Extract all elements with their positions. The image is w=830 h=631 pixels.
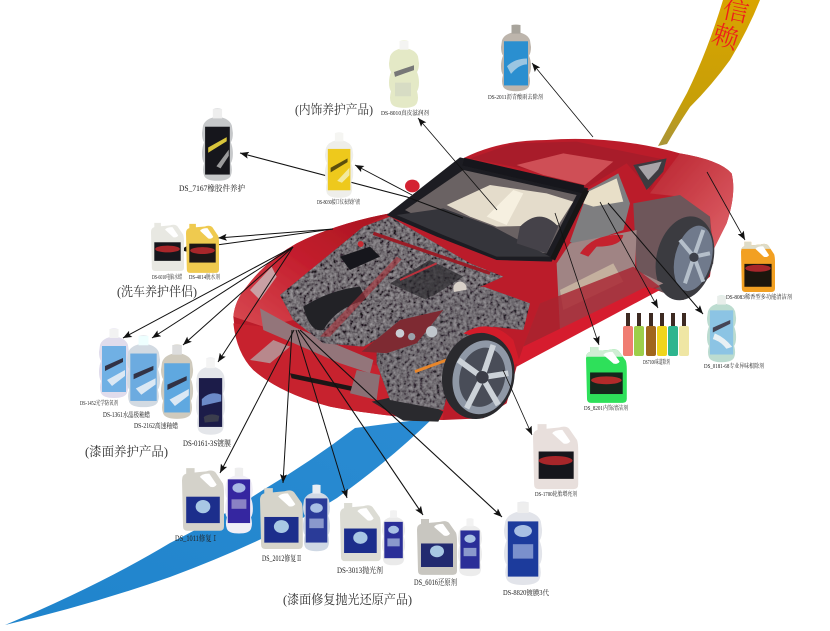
arrow: to yellow jug xyxy=(218,229,333,238)
product: DS-1452 xyxy=(80,328,129,407)
product: DS-0161-3S: DS-0161-3S镀膜 xyxy=(183,438,231,448)
side window xyxy=(570,173,630,247)
headlight area xyxy=(362,310,443,353)
product: white wash jug xyxy=(151,223,184,281)
product: DS_7167: DS_7167橡胶件养护 xyxy=(179,183,245,193)
arrow: to DS_1011 xyxy=(220,330,294,473)
cutaway car illustration xyxy=(233,139,733,426)
product: DS-8030: DS-8030接口仪表保护液 xyxy=(317,198,360,206)
arrow: to DS-8030 xyxy=(355,165,412,195)
product: DS_0181-68 xyxy=(704,295,764,370)
bumper translucent grey band xyxy=(260,308,373,373)
windshield frame xyxy=(387,157,588,262)
slogan text xyxy=(708,0,753,57)
heading: wash companions: (洗车养护伴侣) xyxy=(117,284,197,299)
product: yellow jug: DS-4014脱水剂 xyxy=(189,273,220,281)
product: DS-2011: DS-2011沥青酸雨去除剂 xyxy=(488,93,543,101)
arrow: to white jug xyxy=(180,229,333,250)
product: DS-1452: DS-1452光学防氧剂 xyxy=(80,399,118,407)
arrow: to DS_2012 xyxy=(283,330,292,483)
heading: paint restoration: (漆面修复抛光还原产品) xyxy=(283,592,412,607)
dashboard xyxy=(397,208,550,257)
roof panel xyxy=(470,142,667,190)
product: DS_8201 xyxy=(584,347,628,412)
product: DS-8820: DS-8820镀膜3代 xyxy=(503,588,549,597)
product: DS-0161-3S xyxy=(183,358,231,448)
product: DS-1361 xyxy=(103,336,160,419)
arrow: to DS-0161 xyxy=(218,247,293,362)
front fender cutaway xyxy=(377,287,530,410)
arrow: to DS_0181 xyxy=(608,203,703,314)
leader arrows xyxy=(123,63,745,517)
product: DS-1700 xyxy=(533,424,578,498)
arrow: to DS_8201 xyxy=(555,213,599,345)
door xyxy=(557,230,663,330)
rear quarter panel xyxy=(650,153,733,250)
front wheel xyxy=(434,326,523,426)
left mirror xyxy=(405,180,420,192)
bumper lower vents xyxy=(250,340,290,363)
product: DS_2012 set: DS_2012修复Ⅱ xyxy=(262,553,302,563)
blue swoosh xyxy=(5,418,433,625)
left headlight xyxy=(250,267,277,300)
product: DS_7167 xyxy=(179,109,245,193)
arrow: to DS-8083 xyxy=(707,172,745,240)
product: DS-2011 xyxy=(488,24,543,101)
product: DS_0181-68: DS_0181-68专业异味根除剂 xyxy=(704,362,764,370)
product: DS-8083: DS-8083稀香型多功能清洁剂 xyxy=(726,293,792,301)
product: white wash jug: DS-6010电脑水蜡 xyxy=(152,273,182,281)
heading: interior care: (内饰养护产品) xyxy=(295,102,373,117)
sunroof interior xyxy=(517,153,613,185)
product: DS_6016 set: DS_6016还原剂 xyxy=(414,577,457,587)
arrow: to DS-8820 xyxy=(300,330,502,517)
product: DS-1361: DS-1361水晶极釉蜡 xyxy=(103,410,150,419)
roof header bar xyxy=(463,162,583,189)
product: DS-2162: DS-2162高速釉蜡 xyxy=(134,421,178,430)
rear wheel xyxy=(647,210,723,307)
heading: paint care: (漆面养护产品) xyxy=(85,444,168,459)
front splitter xyxy=(372,393,443,422)
gold ribbon with slogan xyxy=(658,0,760,146)
product: DS_8201: DS_8201内饰清洁剂 xyxy=(584,404,628,412)
arrow: to DS_6016 xyxy=(298,330,423,515)
arrow: to DS-3013 xyxy=(296,330,347,498)
arrow: to DS-1361 xyxy=(152,247,293,338)
product: DS-3013 set: DS-3013抛光剂 xyxy=(337,565,383,575)
engine bay xyxy=(277,213,510,350)
rear window xyxy=(633,158,667,190)
hood highlight xyxy=(233,213,390,327)
product: DS-2162 xyxy=(134,345,193,430)
arrow: to DS_7167 xyxy=(240,153,463,218)
product: DS-8010: DS-8010真皮滋润剂 xyxy=(381,109,429,117)
product: DS-8083 xyxy=(726,242,792,301)
product: DS-8010 xyxy=(381,40,429,117)
arrow: to DS-1700 xyxy=(503,370,532,435)
product: DS-8820 xyxy=(503,502,549,597)
cream seats xyxy=(447,185,573,227)
car body xyxy=(233,139,733,420)
arrow: to DS-2011 xyxy=(532,63,593,137)
product: fragrance sprays xyxy=(623,313,689,366)
product: DS_1011 set xyxy=(175,467,253,543)
A pillar xyxy=(553,190,587,259)
arrow: to DS-1452 xyxy=(123,247,293,338)
product: fragrance sprays: DS7100味道除剂 xyxy=(643,358,670,366)
product: DS_6016 set xyxy=(414,518,482,587)
slogan text: 赖 xyxy=(708,14,745,57)
cabin through windshield xyxy=(405,170,577,253)
product: DS-1700: DS-1700轮胎增亮剂 xyxy=(535,490,577,498)
product: DS_1011 set: DS_1011修复Ⅰ xyxy=(175,533,218,543)
arrow: to DS-8010 xyxy=(418,118,497,210)
arrow: to fragrance sprays xyxy=(600,202,658,308)
product: DS-3013 set xyxy=(337,503,405,575)
product: yellow jug xyxy=(186,224,220,281)
product: DS-8030 xyxy=(317,132,360,206)
door mirror xyxy=(580,235,623,257)
engine parts xyxy=(340,247,380,270)
product: DS_2012 set xyxy=(260,484,330,563)
arrow: to DS-2162 xyxy=(183,247,293,345)
front bumper xyxy=(233,323,443,420)
rear cutaway area xyxy=(633,195,713,300)
